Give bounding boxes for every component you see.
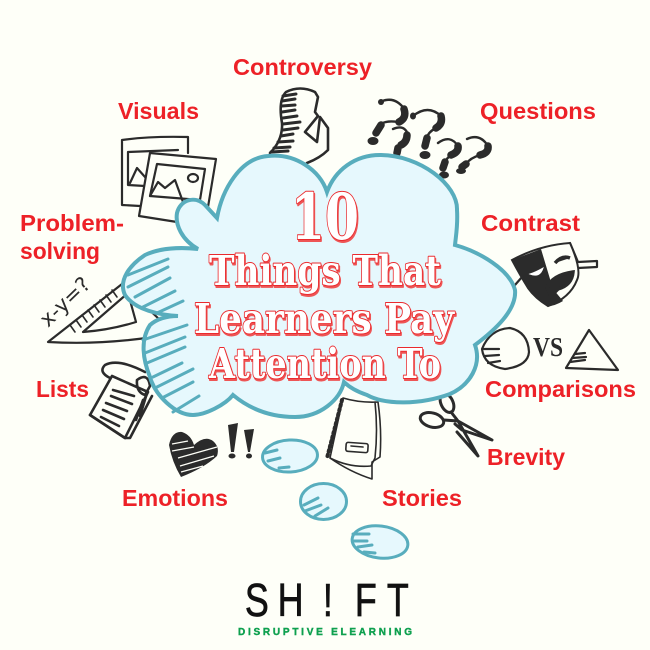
logo wordmark: SH!FT: [245, 575, 409, 626]
title line 1: Things That: [209, 247, 441, 295]
label: Visuals: Visuals: [118, 98, 199, 124]
cloud hatching: [128, 259, 199, 412]
heart: [169, 432, 218, 477]
icon: comparisons circle vs triangle: [482, 328, 618, 370]
exclamation marks: [228, 423, 254, 452]
title line 2: Learners Pay: [194, 295, 455, 343]
label: Lists: Lists: [36, 376, 89, 402]
label: Brevity: Brevity: [487, 444, 565, 470]
logo: SHIFT Disruptive Elearning: [238, 575, 412, 638]
label: Controversy: Controversy: [233, 54, 372, 80]
title number 10: 10: [291, 180, 359, 255]
label: Questions: Questions: [480, 98, 596, 124]
circle shape: [482, 328, 529, 369]
label: Comparisons: Comparisons: [485, 376, 636, 402]
thought bubble: large cloud: [123, 155, 515, 417]
triangle shape: [566, 330, 618, 370]
label: Stories: Stories: [382, 485, 462, 511]
icon: stories notebook: [327, 398, 381, 479]
label: Problem-solving: [20, 210, 124, 264]
icon: visuals picture frames: [122, 137, 216, 222]
icon: brevity scissors: [419, 391, 492, 456]
icon: question marks: [368, 99, 488, 178]
handwritten equation: x-y=?: [35, 272, 95, 332]
title: [194, 180, 455, 388]
label: Contrast: Contrast: [481, 210, 580, 236]
label: Problem-solving: Problem-: [20, 210, 124, 236]
thought bubble: small 3: [350, 523, 410, 561]
logo tagline: DISRUPTIVE ELEARNING: [238, 627, 412, 638]
icon: controversy thinking head: [270, 88, 328, 163]
icon: contrast theatre mask: [512, 243, 597, 306]
label: Emotions: Emotions: [122, 485, 228, 511]
vs text: VS: [533, 332, 563, 362]
thought bubble: small 2: [300, 484, 346, 520]
icon: problem-solving set square: [35, 272, 160, 343]
label: Problem-solving: solving: [20, 238, 100, 264]
title line 3: Attention To: [208, 340, 441, 388]
icon: emotions heart and exclamation marks: [169, 423, 254, 477]
icon: lists notepad: [90, 363, 152, 438]
thought bubble: small 1: [262, 439, 318, 473]
